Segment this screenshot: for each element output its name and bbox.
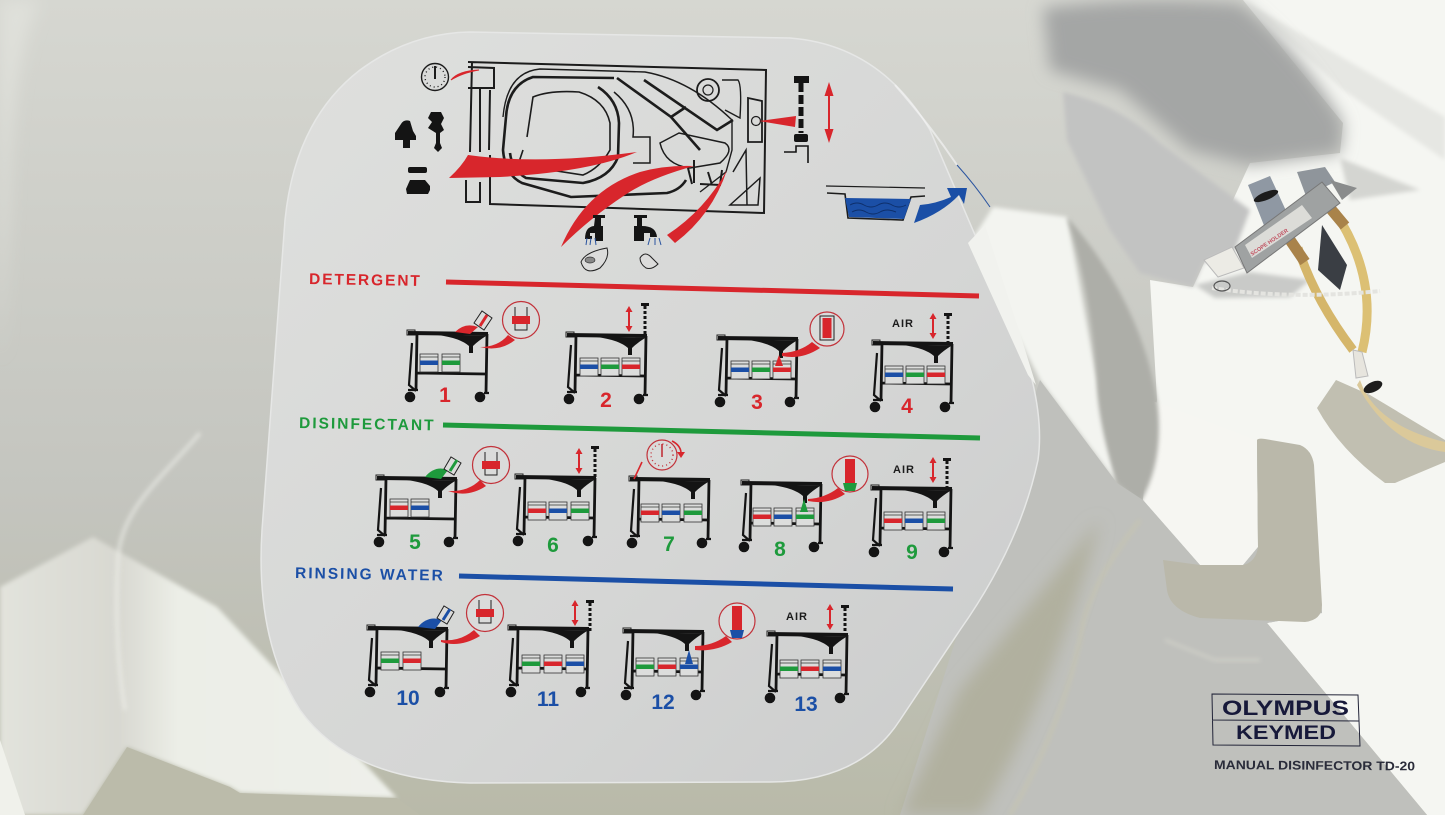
step 11 — [506, 600, 594, 711]
step 10 — [365, 594, 504, 710]
upper right white surface — [1143, 0, 1445, 815]
bottom left lit corner — [0, 740, 25, 815]
arrow: blue outflow — [914, 188, 967, 223]
step 4: AIR — [892, 318, 914, 330]
step 3 — [715, 312, 844, 414]
L-shaped notch — [1163, 439, 1322, 622]
connector device with tubes: SCOPE HOLDER — [1250, 228, 1290, 258]
step 13: 13 — [794, 693, 818, 716]
heading: DISINFECTANT: DISINFECTANT — [299, 415, 436, 434]
step 13 — [765, 604, 849, 716]
connector device with tubes — [1195, 167, 1445, 483]
step 9 — [869, 457, 953, 564]
white block — [1204, 247, 1244, 277]
step 1: pour detergent into tank — [405, 302, 540, 407]
step 4 — [870, 313, 954, 418]
heading: DETERGENT: DETERGENT — [309, 271, 422, 290]
step 9: AIR — [893, 464, 915, 476]
left moulded rim — [0, 0, 40, 360]
icon: basin of water — [826, 186, 925, 220]
shadow tray — [1317, 380, 1445, 483]
sunlit patch bottom left — [0, 537, 397, 815]
step 3: 3 — [751, 391, 763, 414]
icon: plug rod — [784, 76, 809, 163]
step 8 — [739, 456, 868, 561]
step 8: 8 — [774, 538, 786, 561]
logo: Olympus Keymed: OLYMPUS — [1222, 697, 1349, 720]
heading: RINSING WATER: RINSING WATER — [295, 565, 445, 585]
upper pins — [1248, 176, 1288, 228]
step 4: 4 — [901, 395, 913, 418]
diagram: top view of disinfector — [466, 62, 766, 213]
metal block — [1235, 182, 1340, 273]
arrow: large red pointer to tray — [449, 152, 637, 178]
icon: black valve parts — [395, 112, 444, 194]
step 12: 12 — [651, 691, 675, 714]
step 12 — [621, 603, 755, 714]
step 13: AIR — [786, 611, 808, 623]
divider line: rinsing water — [459, 576, 953, 589]
step 5 — [374, 446, 510, 554]
step 1: pour detergent into tank: 1 — [439, 384, 451, 407]
step 7: gauge — [627, 440, 711, 556]
tubes — [1298, 248, 1353, 350]
logo: Olympus Keymed — [1212, 694, 1360, 746]
arrow: red pointer to right port — [759, 116, 796, 127]
sunlit wedge on plate edge — [968, 225, 1036, 385]
raised rib — [1063, 92, 1250, 287]
plate shadow zone bottom — [900, 520, 1100, 815]
step 2 — [564, 303, 649, 412]
arrow: red pointer from left tap — [561, 166, 694, 247]
bottom shadow shelf — [83, 747, 420, 815]
caption: product name: MANUAL DISINFECTOR TD-20 — [1214, 758, 1415, 773]
icon: taps with spray and parts — [581, 215, 661, 271]
icon: gauge dial — [422, 64, 479, 90]
cast shadow below device — [1195, 272, 1310, 298]
divider line: disinfectant — [443, 425, 980, 438]
step 7: gauge: 7 — [663, 533, 675, 556]
step 5: 5 — [409, 531, 421, 554]
white wedge beside plate — [970, 207, 1117, 483]
step 9: 9 — [906, 541, 918, 564]
panel: instruction plate — [261, 32, 1040, 783]
top dark cast shadow — [1043, 0, 1343, 165]
rib lower band — [1067, 217, 1159, 503]
step 11: 11 — [537, 688, 559, 711]
step 10: 10 — [396, 687, 420, 710]
divider line: detergent — [446, 282, 979, 296]
window white between rib and notch — [1143, 400, 1258, 565]
joint — [1353, 350, 1368, 378]
step 6 — [513, 446, 599, 557]
lower right shadow — [900, 380, 1427, 815]
arrow: up and down — [824, 82, 834, 143]
step 2: 2 — [600, 389, 612, 412]
arrow: red pointer from right tap — [667, 170, 727, 243]
step 6: 6 — [547, 534, 559, 557]
chain — [1212, 288, 1380, 295]
logo: Olympus Keymed: KEYMED — [1236, 723, 1336, 744]
